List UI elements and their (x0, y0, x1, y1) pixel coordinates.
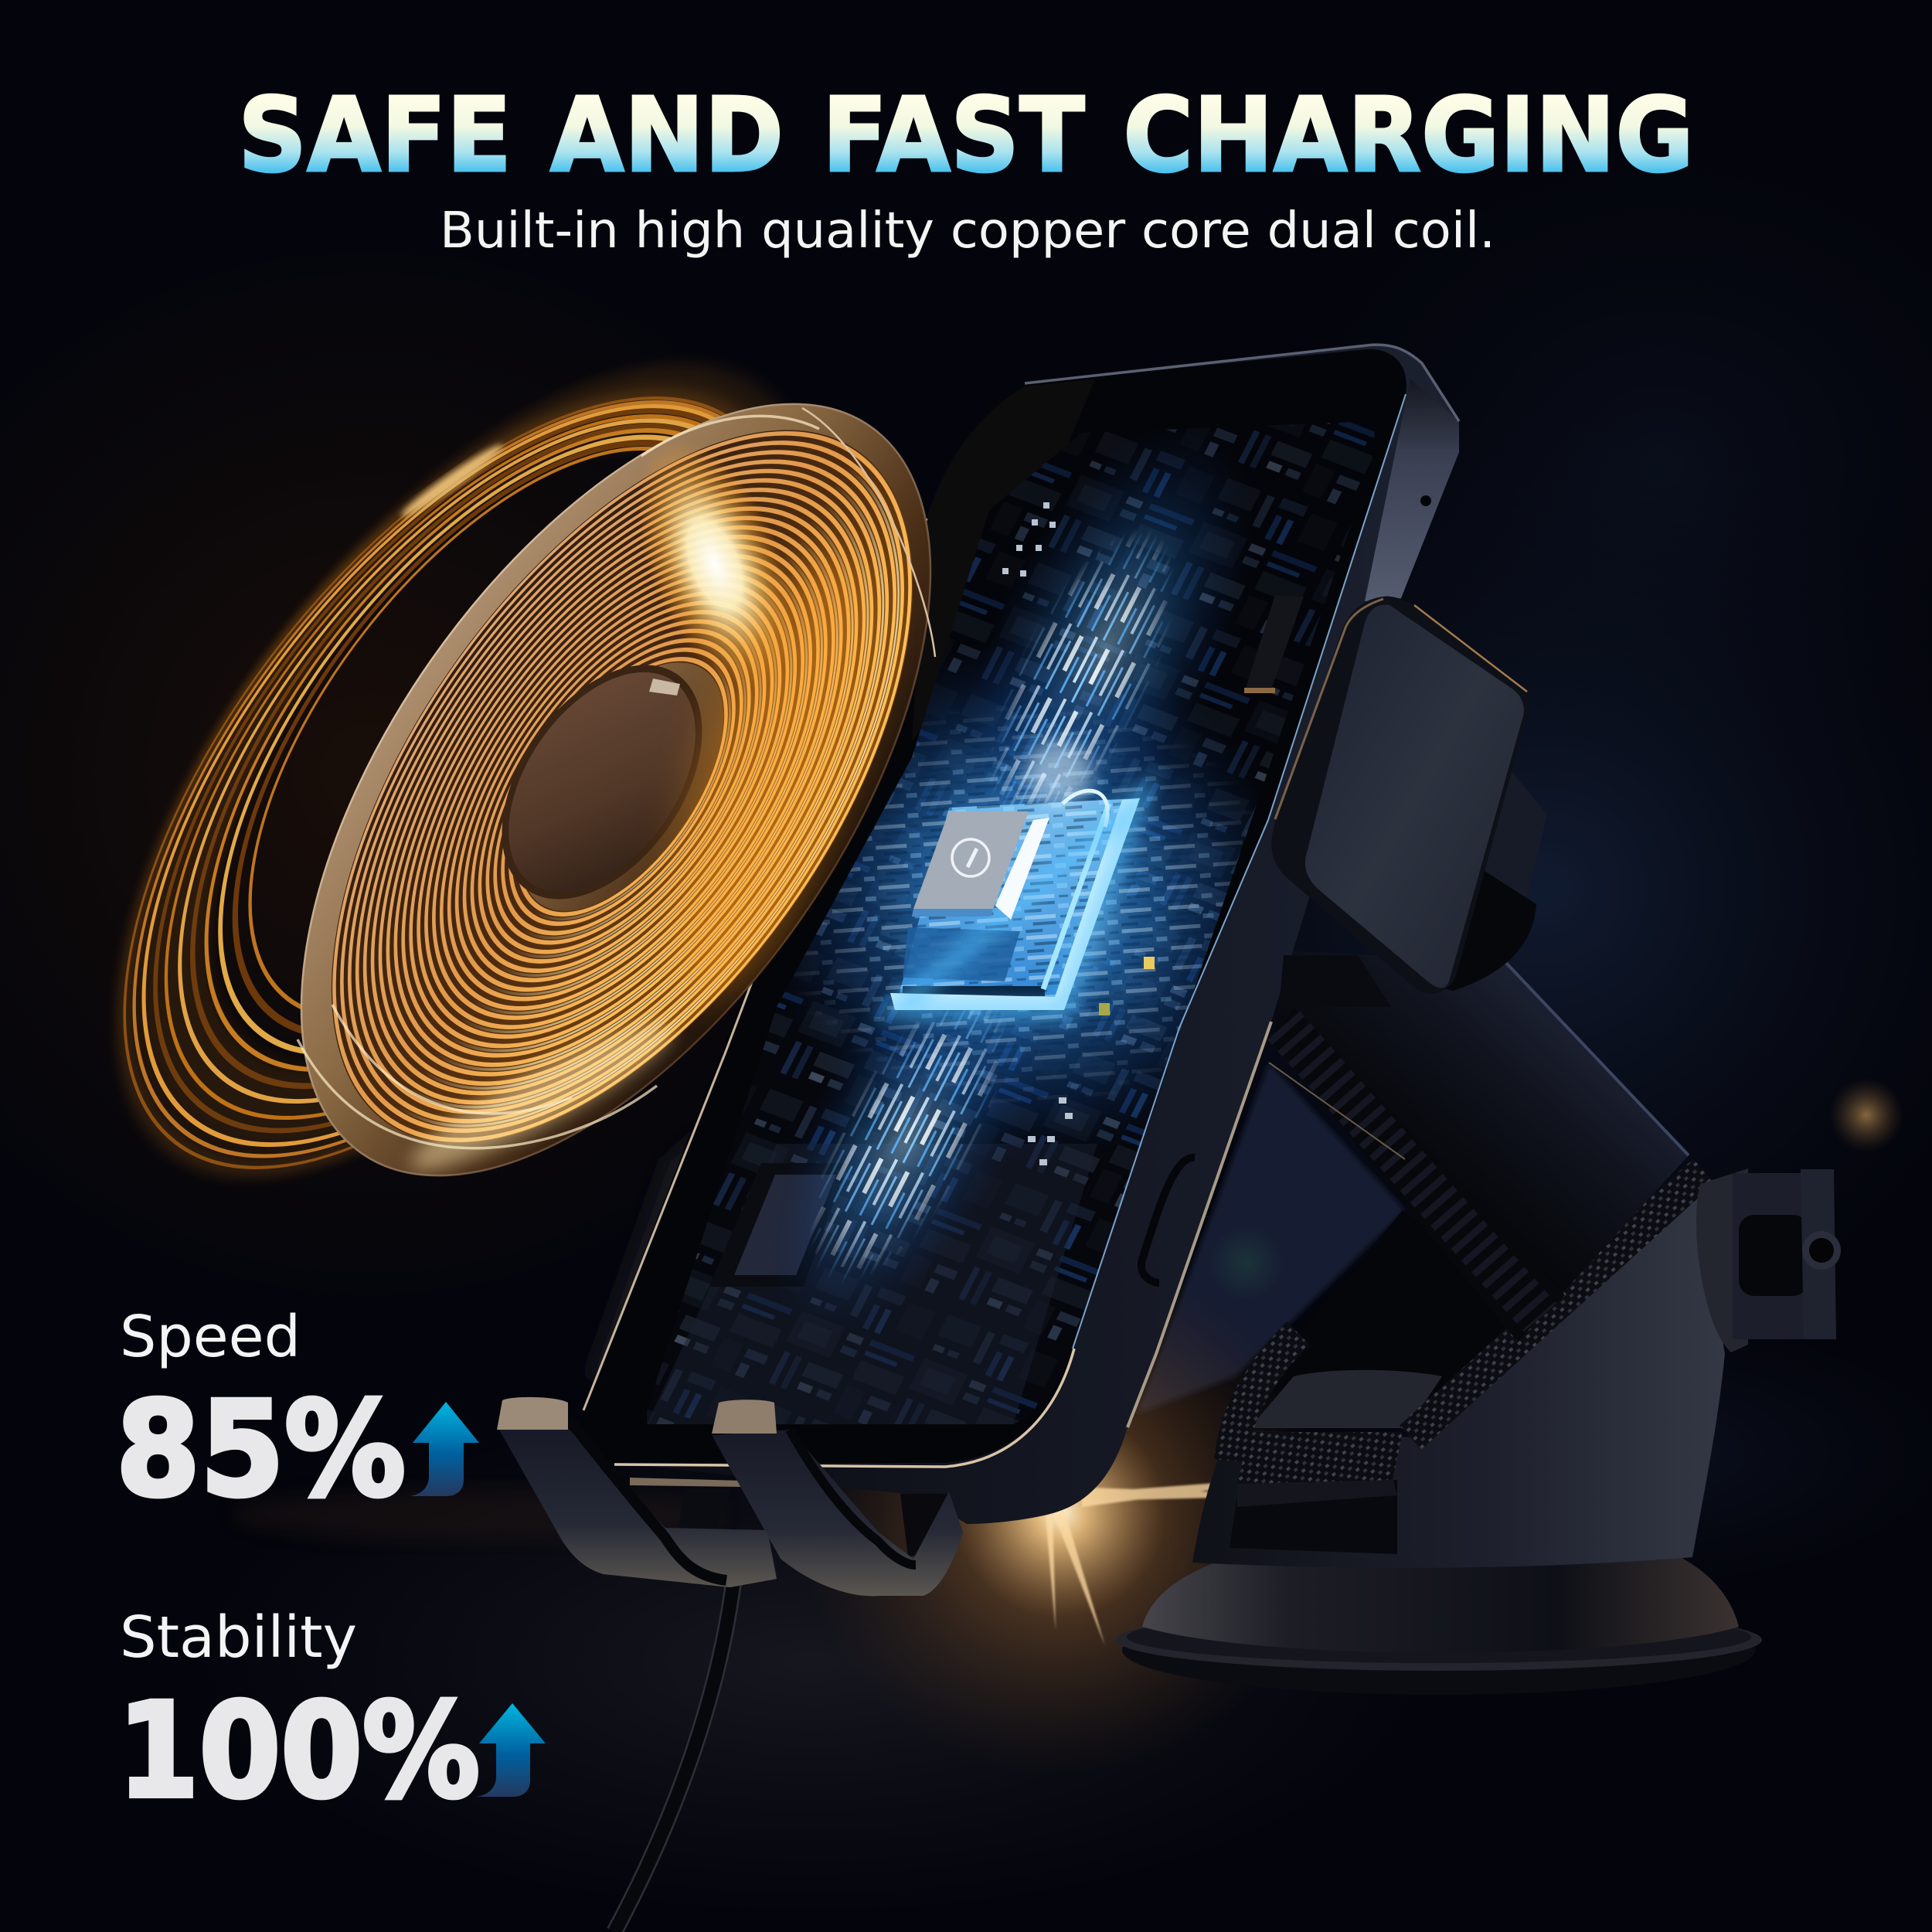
hot glow (399, 418, 910, 1189)
cup dome (1142, 1552, 1739, 1653)
side button (1141, 1158, 1195, 1283)
lower lighter board (647, 1144, 1097, 1424)
subtitle: Built-in high quality copper core dual coil. (440, 202, 1495, 260)
parts (1002, 502, 1073, 1165)
holder highlight edge (1128, 1022, 1271, 1427)
screen edge lines (1073, 394, 1406, 1349)
icon: up arrow (410, 1402, 479, 1496)
disc (177, 297, 1055, 1283)
large ic (709, 1163, 848, 1287)
yellow parts (1099, 957, 1155, 1015)
carbon strap (1230, 1171, 1704, 1461)
holder hooks (497, 1397, 963, 1596)
tray box (1230, 1480, 1397, 1554)
hinge (1279, 955, 1391, 1007)
dark gap under arm (1264, 1210, 1553, 1391)
title: SAFE AND FAST CHARGING (238, 77, 1694, 196)
left silver edge (583, 519, 927, 1410)
value: 100% (117, 1675, 480, 1827)
coil windings (220, 335, 1024, 1238)
screen circuit board (647, 422, 1375, 1424)
label: Stability (120, 1604, 357, 1671)
outer thin halo (802, 408, 935, 657)
upper tray (1250, 1370, 1442, 1428)
knob (1696, 1168, 1841, 1352)
overlay arcs across the disc (298, 416, 819, 1148)
icon: up arrow (476, 1703, 546, 1797)
chip base (895, 798, 1140, 1010)
stat: stability (117, 1604, 546, 1827)
tip (712, 1400, 777, 1434)
metal side strip (1365, 379, 1459, 601)
blue glow (983, 448, 1235, 804)
chip top (913, 811, 1029, 909)
core tab (649, 679, 680, 696)
label: Speed (120, 1304, 301, 1370)
stat: speed (116, 1304, 479, 1526)
phone (541, 345, 1459, 1580)
shield icon (952, 839, 989, 876)
tip (497, 1397, 568, 1430)
telescopic arm (1274, 951, 1841, 1352)
top edge highlight (1025, 345, 1459, 421)
centre hole (461, 628, 743, 936)
left hook (497, 1397, 777, 1587)
glowing frame (890, 798, 1140, 1010)
light flare behind phone (232, 1078, 1903, 1775)
camera hole (1420, 495, 1431, 506)
phone body and holder (583, 345, 1459, 1524)
clamp pad (1271, 597, 1547, 1007)
dark vertical component (1246, 595, 1304, 689)
mount: suction base (1116, 1171, 1762, 1695)
black screen (583, 349, 1406, 1463)
outer light trails (0, 286, 913, 1280)
carbon patch (1237, 1432, 1403, 1484)
cup rim (1122, 1605, 1756, 1695)
lower backplate struts (630, 1478, 949, 1580)
copper coil (111, 360, 937, 1182)
cable (614, 1577, 734, 1932)
right hook (712, 1400, 963, 1596)
value: 85% (116, 1373, 406, 1526)
column (1192, 1182, 1725, 1568)
glowing chip (890, 740, 1140, 1010)
